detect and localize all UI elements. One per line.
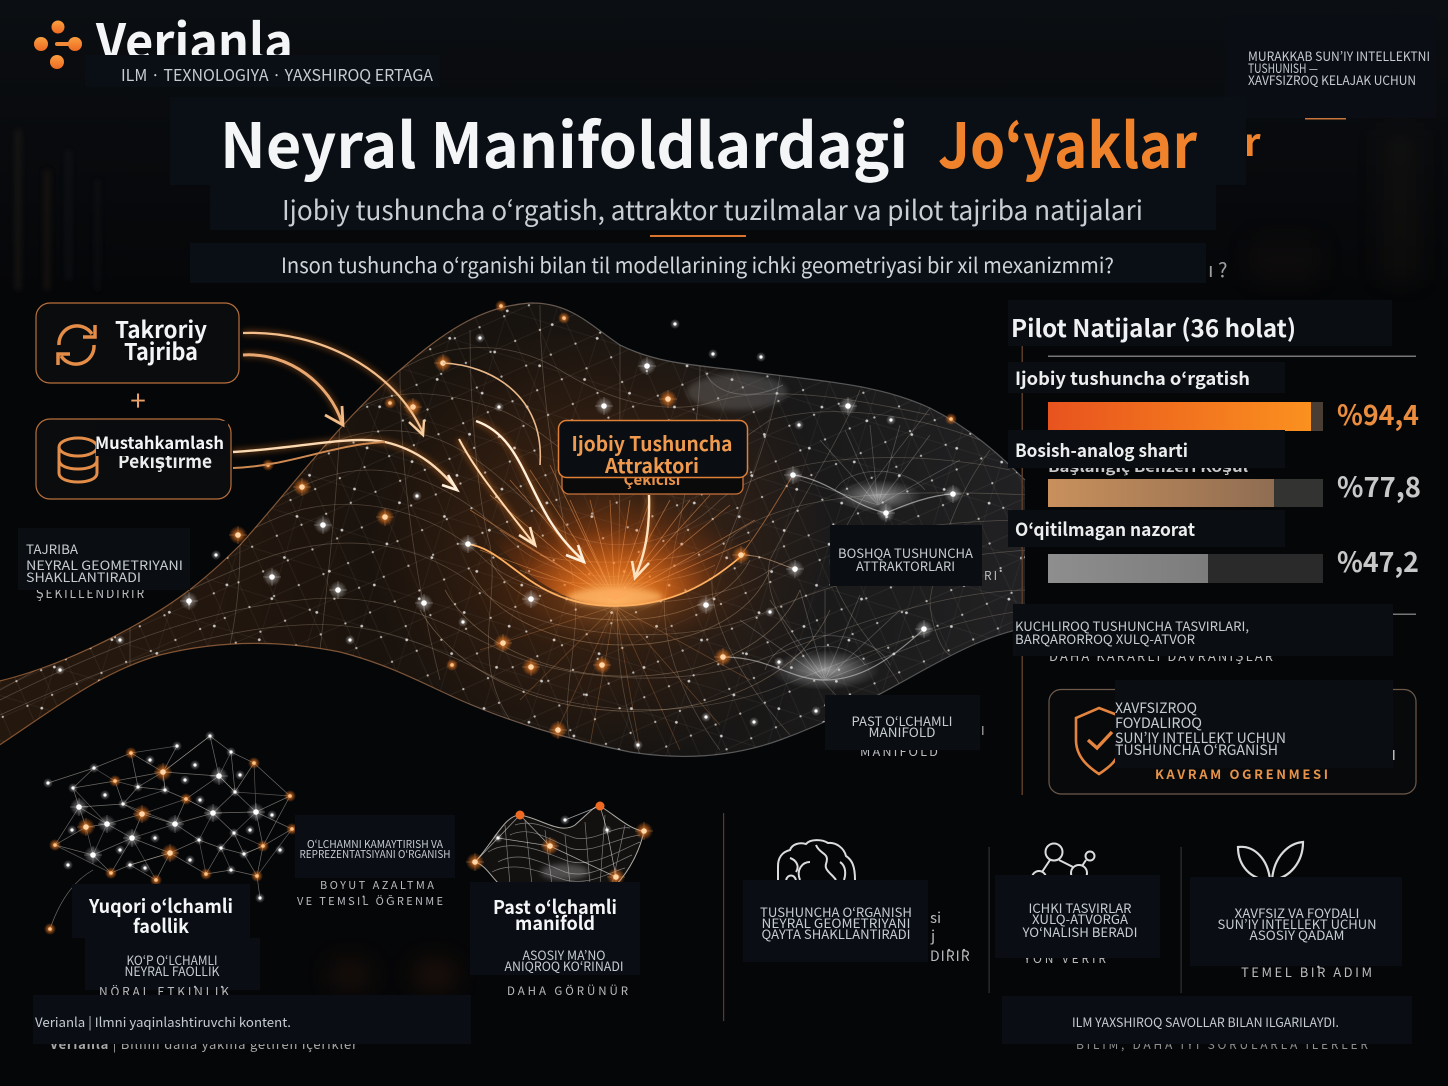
arrowhead — [325, 406, 343, 425]
caption: neural activity — [85, 938, 260, 1000]
safer AI card: TUSHUNCHA O‘RGANISH — [1115, 739, 1278, 760]
panel: repeated experience: Takroriy — [115, 311, 207, 345]
dividers — [723, 813, 1182, 1021]
takeaway: safe AI: TEMEL BİR ADIM — [1241, 962, 1374, 981]
callout: attractor: Çekicisi — [624, 469, 680, 490]
takeaway: brain: j — [930, 925, 935, 946]
subtitle — [210, 185, 1216, 237]
label: other attractors — [830, 525, 982, 586]
attractor fan lines — [470, 465, 755, 750]
arrow: repeated experience 2 — [243, 355, 342, 423]
safer AI card: XAVFSIZROQ — [1115, 697, 1197, 718]
caption: neural activity: NÖRAL ETKİNLİK — [99, 983, 231, 1000]
takeaway: safe AI: SUN’IY INTELLEKT UCHUN — [1218, 914, 1376, 933]
plus sign: + — [130, 380, 146, 420]
caption: dimensionality reduction: O‘LCHAMNI KAMAYTIRISH VA — [307, 837, 444, 852]
takeaway: brain: si — [930, 907, 941, 928]
footer left: Verianla | Bilimi daha yakına getiren içerikler — [49, 1034, 358, 1053]
takeaway: behaviour: XULQ-ATVORGA — [1032, 909, 1128, 928]
conclusion text: BARQARORROQ XULQ-ATVOR — [1015, 629, 1195, 648]
bar: pressure analog: %77,8 — [1337, 466, 1421, 506]
bar: pressure analog: Bosish-analog sharti — [1015, 437, 1188, 463]
heading: Pilot Natijalar (36 holat) — [1011, 309, 1296, 344]
subtitle: Ijobiy tushuncha o‘rgatish, attraktor tuzilmalar va pilot tajriba natijalari — [282, 189, 1143, 228]
arrow: reinforcement 2 — [233, 442, 385, 468]
takeaway: safe AI: ASOSIY QADAM — [1250, 925, 1344, 944]
tagline box — [85, 55, 440, 87]
heading and caption: low dimensional manifold: DAHA GÖRÜNÜR — [507, 983, 630, 999]
icon: shield — [1076, 708, 1120, 774]
top right note: MURAKKAB SUN’IY INTELLEKTNI — [1248, 46, 1430, 65]
footer right: BİLİM, DAHA İYİ SORULARLA İLERLER — [1076, 1036, 1369, 1053]
takeaway: behaviour: ICHKI TASVIRLAR — [1028, 898, 1132, 917]
mesh: rings under attractor — [420, 552, 830, 711]
heading: high dimensional activity: Yuqori o‘lchamli — [88, 892, 233, 919]
icon: network — [1032, 844, 1094, 885]
panel: pilot results — [1008, 300, 1421, 795]
callout: attractor — [558, 420, 748, 494]
takeaway: brain: TUSHUNCHA O‘RGANISH — [760, 902, 912, 921]
heading and caption: low dimensional manifold — [470, 882, 640, 999]
takeaway: safe AI: XAVFSIZ VA FOYDALI — [1234, 903, 1360, 922]
panel: repeated experience: Tajriba — [124, 333, 198, 367]
conclusion text: KUCHLIROQ TUSHUNCHA TASVIRLARI, — [1015, 616, 1249, 635]
arrow: repeated experience — [243, 333, 423, 433]
caption: dimensionality reduction: REPREZENTATSIYANI O‘RGANISH — [300, 847, 450, 862]
takeaway: behaviour — [995, 844, 1160, 967]
footer left: Verianla | Ilmni yaqinlashtiruvchi kontent. — [35, 1012, 291, 1031]
arrows into attractor — [233, 333, 649, 578]
top right note: XAVFSIZROQ KELAJAK UCHUN — [1248, 70, 1416, 89]
bar: positive teaching: Ijobiy tushuncha o‘rgatish — [1015, 365, 1250, 391]
takeaway: brain — [743, 840, 971, 966]
brand name: Verianla — [95, 3, 293, 75]
heading: high dimensional activity — [72, 884, 250, 939]
stray fragment: MANIFOLD — [860, 743, 940, 760]
safer AI card: FOYDALIROQ — [1115, 712, 1202, 733]
arrow: inner curve — [443, 363, 540, 465]
caption: neural activity: NEYRAL FAOLLIK — [124, 961, 220, 980]
arrowhead — [409, 420, 424, 435]
safer AI card: SUN’IY INTELLEKT UCHUN — [1115, 727, 1286, 748]
takeaway: brain: QAYTA SHAKLLANTIRADI — [762, 924, 910, 943]
high dimensional network — [43, 731, 298, 935]
icon: database — [59, 438, 97, 482]
panel: reinforcement: Mustahkamlash — [95, 430, 224, 454]
stray question fragment: ı ? — [1208, 254, 1228, 283]
attractor glow — [503, 530, 728, 640]
label: experience shapes geometry: SHAKLLANTIRADI — [26, 567, 141, 586]
conclusion text — [1013, 604, 1416, 665]
title: Neyral Manifoldlardagi — [220, 96, 908, 186]
arrowhead — [632, 561, 649, 578]
heading — [1008, 300, 1416, 357]
bar: pressure analog — [1008, 430, 1421, 507]
label: low dimensional manifold: MANIFOLD — [868, 722, 936, 741]
arrow: from callout — [635, 495, 649, 577]
bar: untrained control: %47,2 — [1337, 541, 1419, 581]
icon: cycle — [58, 325, 95, 365]
research question: Inson tushuncha o‘rganishi bilan til modellarining ichki geometriyasi bir xil mexanizmmi? — [281, 250, 1114, 280]
arrow: reinforcement — [233, 440, 456, 488]
research question — [190, 243, 1206, 283]
label: experience shapes geometry: NEYRAL GEOMETRIYANI — [26, 555, 183, 574]
icon: brain — [778, 840, 855, 880]
footer right: ILM YAXSHIROQ SAVOLLAR BILAN ILGARILAYDI. — [1072, 1012, 1339, 1031]
attractor rim — [468, 544, 745, 606]
panel: reinforcement — [36, 419, 231, 499]
arrow: inner 3 — [459, 439, 534, 544]
heading and caption: low dimensional manifold: manifold — [515, 909, 595, 936]
title — [170, 96, 1246, 186]
safer AI card: KAVRAM OGRENMESI — [1155, 764, 1328, 783]
bar: positive teaching — [1008, 362, 1419, 434]
heading and caption: low dimensional manifold: Past o‘lchamli — [493, 893, 617, 920]
title: Jo‘yaklar — [938, 96, 1198, 186]
top right note: TUSHUNISH — — [1248, 58, 1318, 77]
mesh: longitude curves — [130, 305, 990, 755]
label: other attractors: BOSHQA TUSHUNCHA — [838, 543, 973, 562]
stray title fragment: r — [1244, 112, 1261, 167]
arrowhead — [519, 527, 535, 545]
bar: untrained control — [1008, 510, 1419, 583]
tagline box: ILM · TEXNOLOGIYA · YAXSHIROQ ERTAGA — [121, 62, 433, 86]
bar: positive teaching: %94,4 — [1337, 394, 1419, 434]
icon: logo nodes — [34, 20, 82, 69]
callout: attractor: Ijobiy Tushuncha — [572, 428, 732, 457]
bar: pressure analog: Başlangıç Benzeri Koşul — [1048, 457, 1249, 477]
small manifold — [466, 802, 653, 886]
callout: attractor: Attraktori — [604, 450, 699, 479]
panel: reinforcement: Pekiştirme — [118, 447, 212, 474]
manifold nodes — [55, 300, 962, 750]
logo wordmark — [34, 3, 293, 75]
takeaway: behaviour: YÖN VERİR — [1023, 950, 1108, 967]
arrowhead — [566, 545, 584, 562]
heading and caption: low dimensional manifold: ANIQROQ KO‘RINADI — [504, 956, 624, 975]
takeaway: brain: DİRİR — [930, 946, 971, 966]
footer left — [33, 995, 471, 1053]
safer AI card — [1049, 680, 1416, 794]
label: experience shapes geometry — [18, 528, 190, 590]
label: experience shapes geometry: TAJRIBA — [26, 539, 78, 558]
heading: high dimensional activity: faollik — [133, 912, 189, 939]
takeaway: brain: NEYRAL GEOMETRIYANI — [762, 913, 910, 932]
arrowhead — [442, 475, 457, 490]
label: low dimensional manifold: PAST O‘LCHAMLI — [852, 711, 952, 730]
icon: leaf — [1238, 842, 1303, 880]
panel: repeated experience — [36, 303, 239, 383]
mesh: latitude curves — [0, 348, 1030, 715]
top right note — [1225, 15, 1436, 120]
takeaway: behaviour: YO‘NALISH BERADI — [1021, 922, 1138, 941]
caption: dimensionality reduction: VE TEMSİL ÖĞRENME — [297, 893, 445, 909]
stray label fragment: ŞEKİLLENDİRİR — [36, 583, 146, 602]
arrow: inner 2 — [476, 421, 583, 560]
label: low dimensional manifold — [825, 695, 984, 750]
label: other attractors: ATTRAKTORLARI — [856, 556, 955, 575]
caption: dimensionality reduction: BOYUT AZALTMA — [320, 877, 436, 893]
stray fragment: Rİ — [984, 567, 1002, 584]
caption: neural activity: KO‘P O‘LCHAMLI — [126, 950, 218, 969]
other attractor basins — [687, 372, 960, 690]
takeaway: safe AI — [1190, 842, 1402, 981]
bar: untrained control: O‘qitilmagan nazorat — [1015, 516, 1195, 542]
caption: dimensionality reduction — [295, 815, 455, 909]
footer right — [1002, 996, 1412, 1053]
heading and caption: low dimensional manifold: ASOSIY MA’NO — [522, 945, 606, 964]
neural manifold surface — [0, 280, 1030, 770]
conclusion text: DAHA KARARLI DAVRANIŞLAR — [1049, 646, 1275, 665]
